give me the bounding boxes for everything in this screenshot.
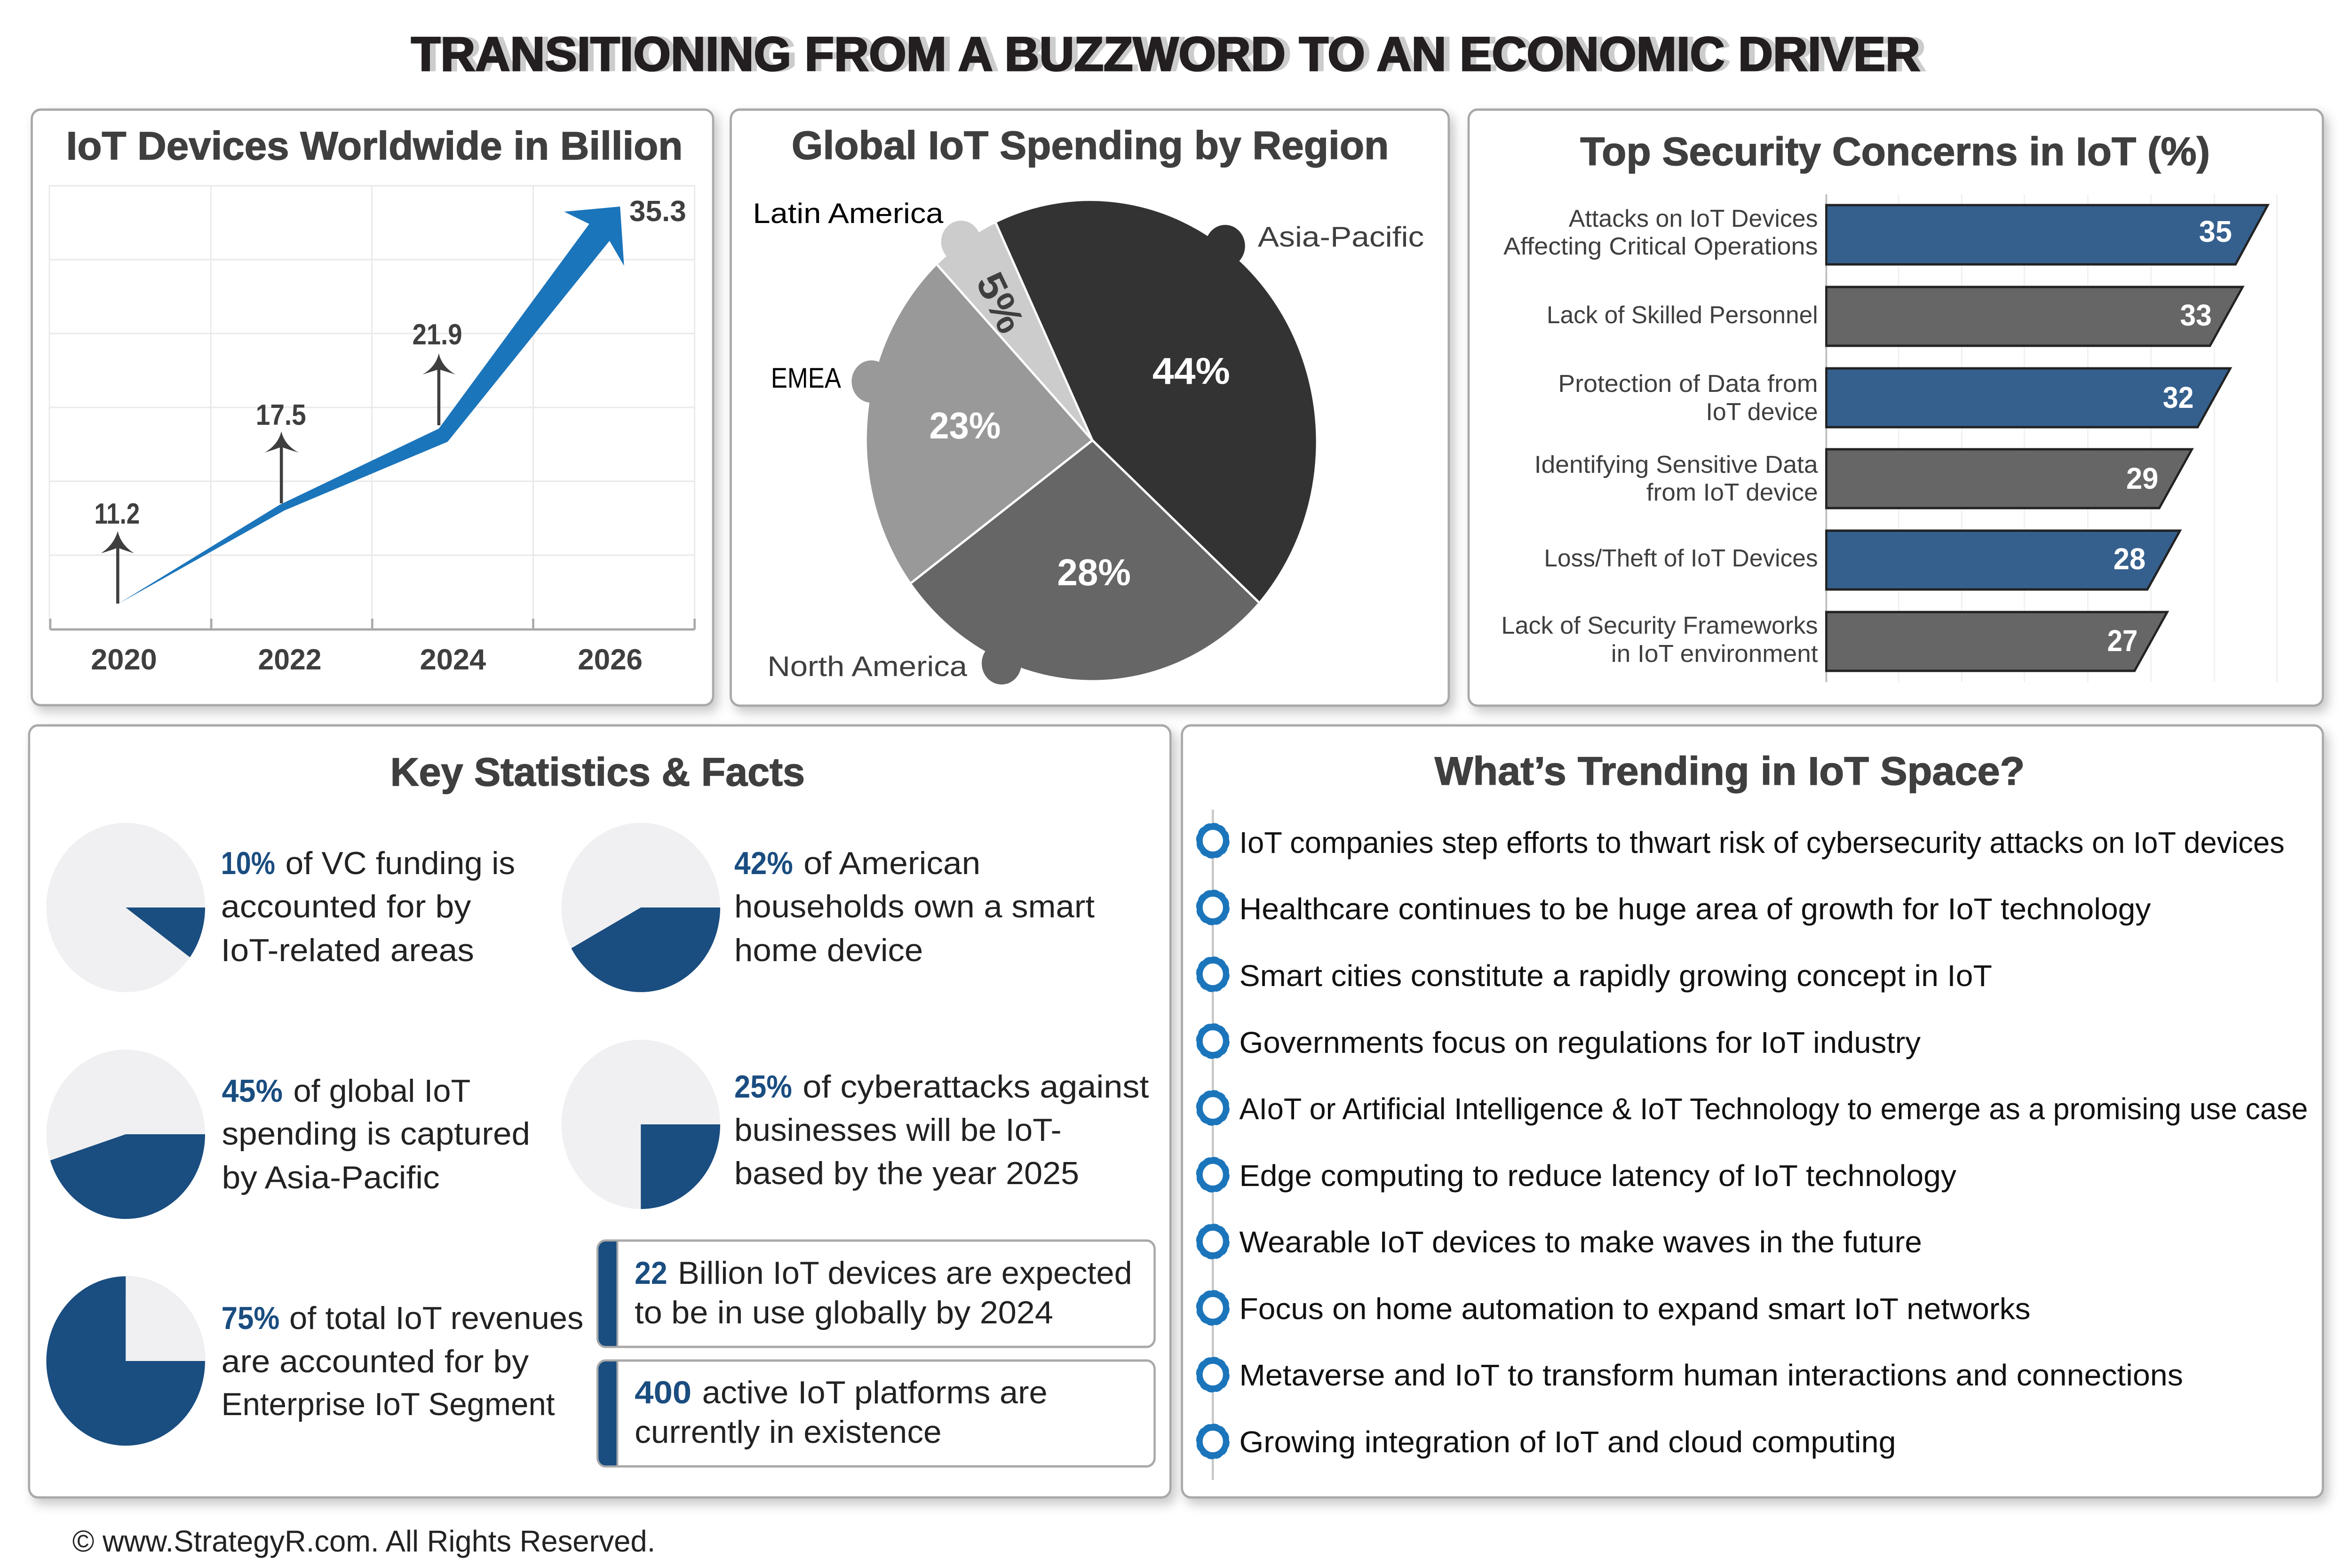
region labels <box>753 198 1424 682</box>
bar labels: Loss/Theft of IoT Devices <box>1544 544 1818 572</box>
bar labels: in IoT environment <box>1611 640 1818 667</box>
year axis labels <box>91 643 643 676</box>
year axis labels: 2022 <box>258 643 321 676</box>
bar labels <box>1501 205 1819 667</box>
bar labels: Attacks on IoT Devices <box>1569 205 1818 232</box>
callout: 400 platforms: active IoT platforms are <box>702 1374 1048 1410</box>
timeline <box>1197 810 1228 1480</box>
trend list: Edge computing to reduce latency of IoT technology <box>1240 1159 1956 1193</box>
region labels: EMEA <box>771 362 841 394</box>
panel: key statistics <box>29 725 1170 1497</box>
stat: 42 percent: home device <box>734 932 923 968</box>
year axis labels: 2024 <box>420 643 486 676</box>
stat: 25 percent: 25% <box>734 1068 792 1104</box>
stat: 42 percent: 42% <box>734 845 793 881</box>
stat: 75 percent <box>46 1276 583 1446</box>
region labels: Latin America <box>753 198 944 229</box>
heading: trending: What’s Trending in IoT Space? <box>1435 749 2025 794</box>
bar labels: from IoT device <box>1646 478 1818 506</box>
stat: 45 percent: 45% <box>222 1073 283 1108</box>
bar values: 29 <box>2126 462 2158 495</box>
pie chart <box>851 201 1316 685</box>
stat: 75 percent: of total IoT revenues <box>289 1300 583 1336</box>
stat: 75 percent: are accounted for by <box>222 1343 529 1379</box>
callout: 400 platforms: currently in existence <box>635 1414 942 1449</box>
trend list <box>1240 826 2308 1459</box>
trend list: Healthcare continues to be huge area of growth for IoT technology <box>1240 892 2151 926</box>
arrow: 2022 <box>265 431 299 503</box>
pie percentages: 23% <box>929 405 1001 447</box>
stat: 25 percent <box>562 1040 1149 1209</box>
arrow: 2020 <box>101 531 134 604</box>
title: TRANSITIONING FROM A BUZZWORD TO AN ECONOMIC DRIVER <box>411 27 1920 81</box>
stat: 75 percent: Enterprise IoT Segment <box>222 1386 555 1422</box>
trend list: Smart cities constitute a rapidly growing concept in IoT <box>1240 959 1992 993</box>
trend list: IoT companies step efforts to thwart risk of cybersecurity attacks on IoT devices <box>1240 826 2285 860</box>
footer copyright: © www.StrategyR.com. All Rights Reserved. <box>72 1525 655 1558</box>
bar labels: Lack of Skilled Personnel <box>1547 301 1818 328</box>
panel: IoT devices worldwide <box>32 110 713 705</box>
trend list: Focus on home automation to expand smart IoT networks <box>1240 1292 2031 1326</box>
stat: 10 percent <box>46 823 515 992</box>
stat: 45 percent: spending is captured <box>222 1115 530 1151</box>
bar values: 28 <box>2114 542 2145 576</box>
stat: 45 percent: of global IoT <box>293 1073 470 1108</box>
year axis labels: 2026 <box>578 643 643 676</box>
bar chart <box>1826 194 2277 682</box>
heading: security: Top Security Concerns in IoT (%) <box>1580 130 2210 174</box>
bar labels: Affecting Critical Operations <box>1503 232 1818 260</box>
pie percentages: 28% <box>1057 552 1131 594</box>
bar labels: Protection of Data from <box>1558 370 1818 397</box>
trend arrow <box>119 207 624 604</box>
callout: 22 billion: to be in use globally by 2024 <box>635 1294 1053 1330</box>
bar values: 27 <box>2107 624 2137 658</box>
line chart <box>49 186 695 676</box>
trend list: Governments focus on regulations for IoT industry <box>1240 1026 1921 1059</box>
callout: 400 platforms: 400 <box>635 1374 691 1410</box>
year axis labels: 2020 <box>91 643 157 676</box>
value labels: 17.5 <box>256 398 306 431</box>
stat: 75 percent: 75% <box>222 1300 279 1336</box>
callout: 22 billion <box>597 1241 1155 1347</box>
stat: 10 percent: of VC funding is <box>286 845 515 881</box>
bar labels: IoT device <box>1706 398 1818 425</box>
stat: 10 percent: accounted for by <box>221 888 471 924</box>
stat: 25 percent: of cyberattacks against <box>803 1068 1149 1104</box>
trend list: Growing integration of IoT and cloud computing <box>1240 1425 1896 1459</box>
title: TRANSITIONING FROM A BUZZWORD TO AN ECONOMIC DRIVER <box>417 27 1926 81</box>
value labels: 21.9 <box>413 318 462 350</box>
region labels: Asia-Pacific <box>1258 221 1424 253</box>
stat: 42 percent: households own a smart <box>734 888 1095 924</box>
trend list: Wearable IoT devices to make waves in the future <box>1240 1226 1922 1259</box>
callout: 22 billion: 22 <box>635 1255 667 1290</box>
pie percentages: 44% <box>1152 350 1230 392</box>
callout: 400 platforms <box>597 1361 1155 1466</box>
value labels: 35.3 <box>629 195 686 227</box>
trend list: AIoT or Artificial Intelligence & IoT Technology to emerge as a promising use case <box>1240 1092 2308 1126</box>
heading: key statistics: Key Statistics & Facts <box>390 750 805 795</box>
pie percentages <box>929 265 1230 594</box>
stat: 10 percent: IoT-related areas <box>221 932 474 968</box>
callout: 22 billion: Billion IoT devices are expected <box>678 1255 1132 1290</box>
stat: 42 percent <box>562 823 1095 992</box>
trend list: Metaverse and IoT to transform human interactions and connections <box>1240 1359 2183 1392</box>
arrow: 2024 <box>422 353 455 425</box>
bar values <box>2107 215 2232 658</box>
stat: 45 percent: by Asia-Pacific <box>222 1159 440 1195</box>
pie percentages: 5% <box>968 265 1033 341</box>
value labels <box>95 195 686 530</box>
bar labels: Identifying Sensitive Data <box>1534 451 1819 478</box>
value labels: 11.2 <box>95 497 140 530</box>
panel: trending in IoT <box>1182 725 2323 1497</box>
panel: top security concerns <box>1469 110 2323 706</box>
bar values: 32 <box>2163 381 2193 414</box>
heading: IoT devices: IoT Devices Worldwide in Billion <box>66 124 683 168</box>
stat: 25 percent: based by the year 2025 <box>734 1155 1079 1191</box>
stat: 45 percent <box>46 1050 530 1219</box>
heading: spending: Global IoT Spending by Region <box>792 124 1389 168</box>
bar values: 33 <box>2180 299 2212 332</box>
panel: global IoT spending <box>731 110 1449 706</box>
stat: 10 percent: 10% <box>221 845 275 881</box>
bar values: 35 <box>2199 215 2232 248</box>
bar labels: Lack of Security Frameworks <box>1501 612 1818 639</box>
stat: 42 percent: of American <box>803 845 980 881</box>
region labels: North America <box>767 651 968 682</box>
stat: 25 percent: businesses will be IoT- <box>734 1112 1062 1147</box>
